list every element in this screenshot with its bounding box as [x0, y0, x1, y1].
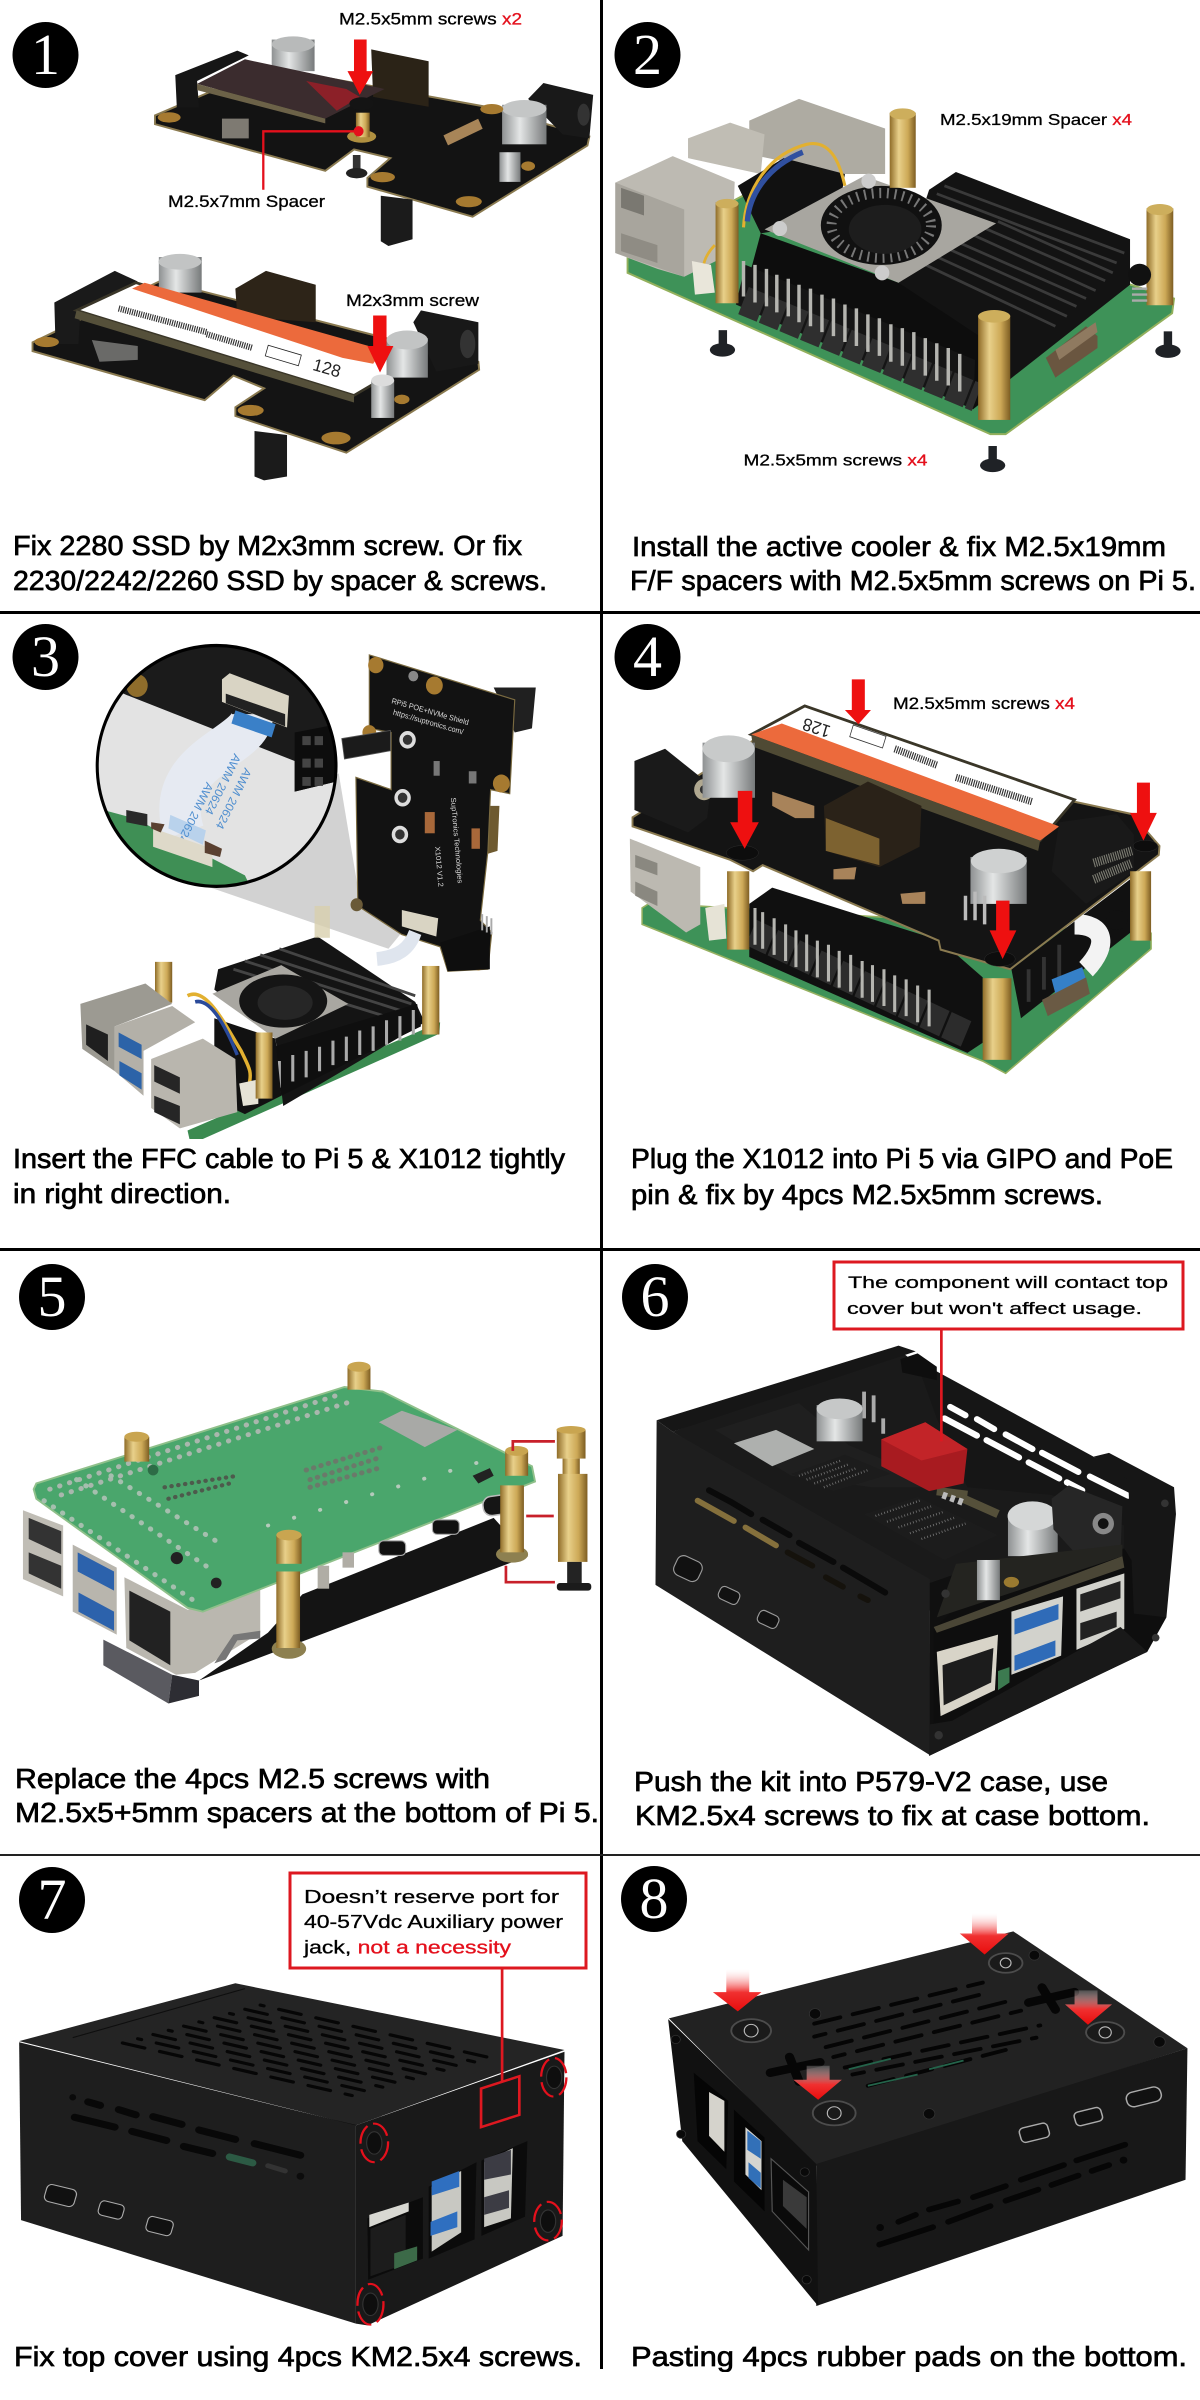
callout: component contact: cover but won't affect usage.	[847, 1299, 1142, 1318]
step number 6	[622, 1264, 688, 1330]
ports	[1018, 2086, 1163, 2143]
panel: step 6	[622, 1262, 1183, 1831]
ports on board side	[318, 1492, 522, 1589]
step number 8	[621, 1866, 687, 1932]
step number 1: 1	[31, 22, 60, 87]
magnifier lens: AWM 20624	[213, 766, 254, 832]
callout: component contact	[834, 1262, 1183, 1329]
arrow	[347, 40, 373, 95]
caption step 3	[13, 1143, 565, 1209]
illustration: X1012 plugged onto Pi 5: 128	[800, 714, 833, 742]
vent slots	[814, 1983, 1040, 2086]
step number 1	[12, 22, 78, 88]
spacers	[716, 108, 1173, 420]
caption step 2: Install the active cooler & fix M2.5x19mm	[632, 531, 1166, 562]
red leader lines	[506, 1441, 555, 1582]
label: M2.5x5mm screws x4: M2.5x5mm screws x4	[744, 452, 928, 470]
caption step 5	[15, 1763, 599, 1828]
step number 2	[614, 22, 680, 88]
shade cone	[210, 773, 402, 949]
caption step 4: Plug the X1012 into Pi 5 via GIPO and PoE	[631, 1143, 1173, 1174]
lower board: 128	[311, 355, 343, 382]
illustration: X1012 board with short SSD and spacer	[33, 36, 593, 480]
side vent slots	[75, 2102, 300, 2155]
panel: step 1	[12, 10, 593, 596]
caption step 1	[13, 530, 547, 596]
screw	[346, 155, 367, 178]
magnifier lens: AWM 20624	[202, 751, 244, 818]
red arrows	[730, 679, 1157, 959]
step number 5	[19, 1264, 85, 1330]
illustration: X1012 plugged onto Pi 5	[630, 679, 1160, 1073]
top vent slots	[122, 2005, 490, 2096]
caption step 5: Replace the 4pcs M2.5 screws with	[15, 1763, 490, 1794]
spacer	[347, 97, 376, 143]
caption step 6: KM2.5x4 screws to fix at case bottom.	[635, 1800, 1150, 1831]
screws	[710, 330, 1181, 472]
highlighted red component	[881, 1422, 967, 1491]
caption step 4: pin & fix by 4pcs M2.5x5mm screws.	[631, 1179, 1103, 1210]
label: M2.5x19mm spacer x4: M2.5x19mm Spacer x4	[940, 112, 1132, 129]
side vent slots	[879, 2145, 1125, 2245]
panel: step 5	[15, 1264, 599, 1828]
step number 8: 8	[640, 1866, 668, 1931]
X1012 board: SupTronics Technologies	[449, 797, 465, 884]
red callout leader	[938, 1328, 945, 1441]
caption step 4	[631, 1143, 1173, 1210]
panel: step 8	[621, 1866, 1187, 2372]
callout line to spacer	[263, 131, 359, 190]
caption step 1: Fix 2280 SSD by M2x3mm screw. Or fix	[13, 530, 522, 561]
step number 4: 4	[633, 624, 662, 689]
caption step 6: Push the kit into P579-V2 case, use	[634, 1766, 1108, 1797]
step number 7: 7	[38, 1867, 66, 1932]
panel: step 4	[614, 624, 1173, 1210]
illustration: kit pushed into open case	[655, 1328, 1176, 1756]
label: M2.5x5mm screws x4: M2.5x5mm screws x4	[893, 694, 1075, 713]
X1012 board: X1012 V1.2	[433, 846, 445, 887]
X1012 board	[342, 655, 536, 971]
illustration: closed case with top cover screws	[19, 1968, 566, 2325]
callout: auxiliary power: jack, not a necessity	[303, 1938, 511, 1958]
X1012 board: RPi5 POE+NVMe Shield	[391, 696, 470, 727]
panel: step 7	[14, 1867, 586, 2372]
caption step 1: 2230/2242/2260 SSD by spacer & screws.	[13, 565, 547, 596]
step number 2: 2	[633, 22, 662, 87]
step number 3	[12, 624, 78, 690]
caption step 3: in right direction.	[13, 1178, 231, 1209]
caption step 5: M2.5x5+5mm spacers at the bottom of Pi 5.	[15, 1797, 599, 1828]
lower board	[33, 254, 479, 480]
caption step 2: F/F spacers with M2.5x5mm screws on Pi 5.	[630, 565, 1196, 596]
magnifier lens	[92, 643, 337, 892]
step number 3: 3	[31, 624, 60, 689]
caption step 2	[630, 531, 1196, 596]
rubber pads	[731, 1953, 1124, 2125]
illustration: FFC cable to Pi 5 and X1012	[80, 643, 536, 1139]
fan wire	[744, 144, 845, 227]
step number 7	[19, 1867, 85, 1933]
step number 5: 5	[38, 1264, 66, 1329]
label: M2x3mm screw: M2x3mm screw	[346, 291, 480, 310]
step number 4	[614, 624, 680, 690]
label: M2.5x7mm spacer: M2.5x7mm Spacer	[168, 192, 325, 211]
red arrows	[713, 1913, 1112, 2100]
callout: auxiliary power: 40-57Vdc Auxiliary power	[304, 1912, 563, 1932]
callout: auxiliary power: Doesn’t reserve port for	[304, 1887, 559, 1907]
caption step 7: Fix top cover using 4pcs KM2.5x4 screws.	[14, 2341, 582, 2372]
metal case	[655, 1346, 1176, 1756]
X1012 board: https://suptronics.com/	[392, 708, 465, 737]
illustration: Pi 5 with active cooler and spacers	[615, 99, 1181, 472]
label: M2.5x5mm screws x2: M2.5x5mm screws x2	[339, 10, 522, 28]
callout: component contact: The component will contact top	[848, 1273, 1168, 1292]
spacer detail	[556, 1426, 591, 1591]
red rotation marks	[357, 2058, 566, 2325]
illustration: case bottom with rubber pads	[668, 1913, 1187, 2306]
caption step 8: Pasting 4pcs rubber pads on the bottom.	[631, 2341, 1187, 2372]
panel: step 3	[12, 624, 565, 1209]
magnifier lens: AWM 20624	[174, 780, 216, 846]
screws	[363, 2066, 562, 2316]
spacers on Pi	[124, 1362, 528, 1659]
caption step 3: Insert the FFC cable to Pi 5 & X1012 tightly	[13, 1143, 565, 1174]
red callout marker	[481, 1968, 519, 2127]
illustration: Pi 5 underside on bottom spacers	[23, 1362, 591, 1703]
caption step 6	[634, 1766, 1150, 1831]
pin connector	[381, 196, 413, 246]
cross slots	[770, 1988, 1075, 2082]
Pi 5 with cooler	[80, 906, 440, 1139]
panel: step 2	[614, 22, 1196, 596]
step number 6: 6	[640, 1264, 670, 1329]
ports on right face	[367, 2141, 527, 2280]
callout: auxiliary power	[290, 1873, 586, 1968]
